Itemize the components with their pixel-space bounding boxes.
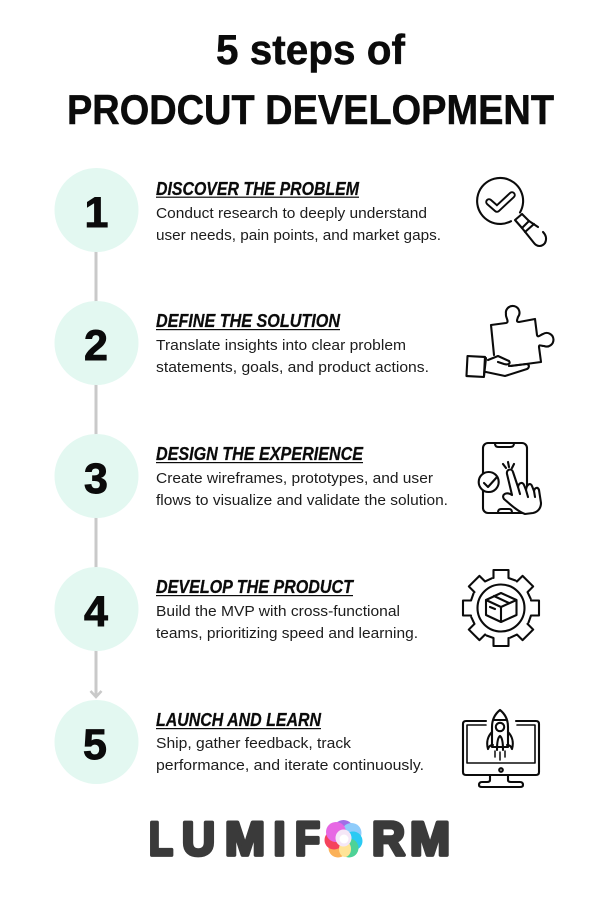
description: design: flows to visualize and validate the solution. xyxy=(156,493,448,509)
title: PRODCUT DEVELOPMENT xyxy=(67,86,554,133)
number badge 3: 3 xyxy=(84,455,108,503)
heading: discover: DISCOVER THE PROBLEM xyxy=(156,179,360,199)
logo: Lumiform: I xyxy=(274,812,286,865)
icon: magnifier with check xyxy=(477,178,546,246)
number badge 4 xyxy=(54,567,138,651)
heading: launch: LAUNCH AND LEARN xyxy=(156,710,322,730)
connector: step 2 to 3 xyxy=(94,383,98,436)
number badge 5: 5 xyxy=(83,721,107,769)
number badge 2 xyxy=(54,301,138,385)
number badge 1: 1 xyxy=(85,189,108,237)
icon: logo flower xyxy=(324,820,362,858)
icon: hand holding puzzle piece xyxy=(466,306,553,377)
heading: design: DESIGN THE EXPERIENCE xyxy=(156,444,364,464)
logo: Lumiform: M xyxy=(410,812,450,865)
connector: step 3 to 4 xyxy=(94,516,98,569)
arrow: step 4 to 5 xyxy=(90,649,102,697)
connector: step 1 to 2 xyxy=(94,250,98,303)
description: develop xyxy=(156,604,418,642)
title xyxy=(67,26,554,133)
logo: Lumiform: M xyxy=(225,812,265,865)
panel: step 4 xyxy=(54,567,539,651)
icon: monitor with rocket xyxy=(463,710,539,787)
panel: step 2 xyxy=(54,301,553,385)
description: launch xyxy=(156,736,424,774)
title: 5 steps of xyxy=(216,26,406,73)
heading: develop: DEVELOP THE PRODUCT xyxy=(156,577,355,597)
number badge 5 xyxy=(54,700,138,784)
heading: define: DEFINE THE SOLUTION xyxy=(156,311,341,331)
description: develop: teams, prioritizing speed and learning. xyxy=(156,626,418,642)
logo: Lumiform: F xyxy=(295,812,320,865)
number badge 2: 2 xyxy=(84,322,108,370)
description: discover xyxy=(156,206,441,244)
icon: phone with tapping hand xyxy=(479,443,541,514)
number badge 3 xyxy=(54,434,138,518)
description: launch: Ship, gather feedback, track xyxy=(156,736,352,752)
description: define: Translate insights into clear problem xyxy=(156,338,406,354)
logo: Lumiform: U xyxy=(182,812,215,865)
panel: step 3 xyxy=(54,434,541,518)
logo: Lumiform: L xyxy=(149,812,173,865)
description: define xyxy=(156,338,429,376)
description: define: statements, goals, and product actions. xyxy=(156,360,429,376)
description: develop: Build the MVP with cross-functional xyxy=(156,604,400,620)
panel: step 5 xyxy=(54,700,539,787)
description: design: Create wireframes, prototypes, and user xyxy=(156,471,433,487)
icon: gear with box xyxy=(463,570,539,646)
description: discover: user needs, pain points, and market gaps. xyxy=(156,228,441,244)
panel: step 1 xyxy=(54,168,546,252)
logo: Lumiform: R xyxy=(372,812,405,865)
description: discover: Conduct research to deeply understand xyxy=(156,206,427,222)
number badge 4: 4 xyxy=(84,588,108,636)
description: design xyxy=(156,471,448,509)
description: launch: performance, and iterate continuously. xyxy=(156,758,424,774)
logo: Lumiform xyxy=(149,812,450,865)
number badge 1 xyxy=(54,168,138,252)
